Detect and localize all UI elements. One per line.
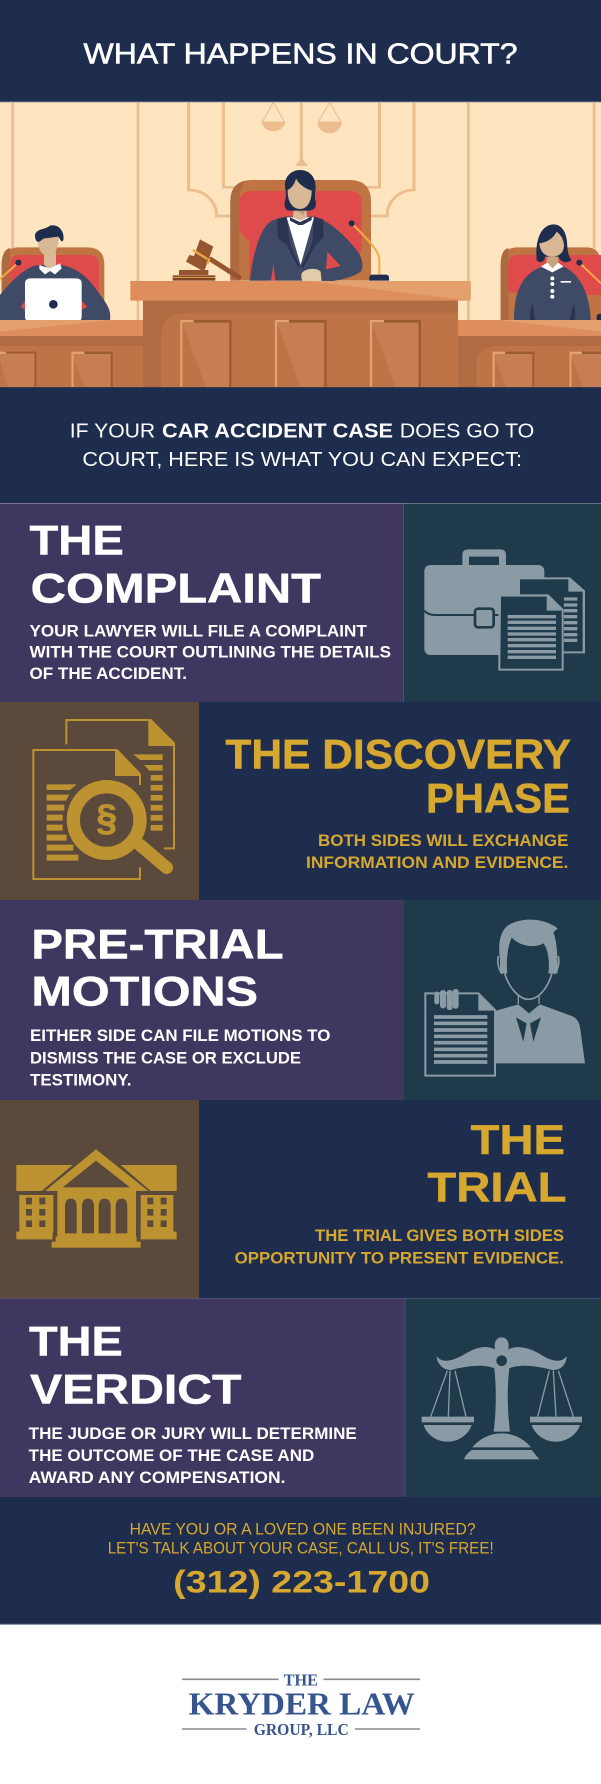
title: WHAT HAPPENS IN COURT? bbox=[84, 38, 518, 70]
panel: the trial bbox=[0, 1100, 601, 1298]
panel: pre-trial motions bbox=[0, 900, 601, 1100]
body text bbox=[235, 1227, 564, 1267]
logo bbox=[182, 1671, 420, 1739]
right clerk bbox=[501, 224, 601, 320]
body text: AWARD ANY COMPENSATION. bbox=[29, 1469, 285, 1487]
heading: PRE-TRIAL bbox=[31, 920, 284, 967]
body text: INFORMATION AND EVIDENCE. bbox=[306, 854, 568, 872]
heading bbox=[31, 920, 284, 1015]
desks bbox=[0, 281, 601, 387]
heading: COMPLAINT bbox=[31, 565, 321, 612]
intro band bbox=[0, 387, 601, 503]
body text: THE TRIAL GIVES BOTH SIDES bbox=[315, 1227, 564, 1245]
heading: VERDICT bbox=[30, 1366, 242, 1413]
body text: TESTIMONY. bbox=[30, 1071, 132, 1089]
icon: briefcase and documents bbox=[424, 549, 585, 671]
header band bbox=[0, 0, 601, 102]
courtroom illustration bbox=[0, 102, 601, 387]
heading: TRIAL bbox=[427, 1164, 566, 1211]
body text: THE OUTCOME OF THE CASE AND bbox=[29, 1447, 315, 1465]
body text: WITH THE COURT OUTLINING THE DETAILS bbox=[30, 644, 391, 662]
body text: EITHER SIDE CAN FILE MOTIONS TO bbox=[30, 1027, 330, 1045]
heading: THE DISCOVERY bbox=[225, 730, 571, 777]
body text: OPPORTUNITY TO PRESENT EVIDENCE. bbox=[235, 1249, 564, 1267]
body text: THE JUDGE OR JURY WILL DETERMINE bbox=[29, 1425, 357, 1443]
panel: the complaint bbox=[0, 503, 601, 702]
heading bbox=[30, 516, 321, 612]
heading bbox=[225, 730, 571, 821]
logo: THE bbox=[284, 1671, 318, 1690]
body text: DISMISS THE CASE OR EXCLUDE bbox=[30, 1049, 301, 1067]
icon: courthouse bbox=[16, 1149, 177, 1248]
panel: the discovery phase bbox=[0, 702, 601, 900]
cta text bbox=[108, 1520, 494, 1558]
section sign: § bbox=[96, 798, 117, 838]
courtroom wall and ornament bbox=[0, 102, 601, 387]
call to action band bbox=[0, 1497, 601, 1625]
logo: KRYDER LAW bbox=[189, 1686, 415, 1722]
intro text: IF YOUR bbox=[70, 421, 155, 443]
intro text bbox=[70, 421, 534, 471]
heading: PHASE bbox=[426, 774, 570, 821]
body text bbox=[29, 1425, 357, 1487]
intro text: CAR ACCIDENT CASE bbox=[162, 421, 393, 443]
body text: OF THE ACCIDENT. bbox=[30, 665, 187, 683]
heading: MOTIONS bbox=[31, 968, 258, 1015]
logo: GROUP, LLC bbox=[254, 1720, 349, 1739]
icon: documents under magnifier bbox=[33, 719, 175, 879]
heading: THE bbox=[29, 1318, 123, 1365]
heading bbox=[29, 1318, 242, 1413]
heading: THE bbox=[471, 1116, 565, 1163]
heading bbox=[427, 1116, 566, 1211]
judge, chair, gavel and microphone bbox=[173, 170, 389, 284]
body text bbox=[306, 832, 569, 872]
body text: BOTH SIDES WILL EXCHANGE bbox=[318, 832, 569, 850]
intro text: DOES GO TO bbox=[400, 421, 534, 443]
panel: the verdict bbox=[0, 1298, 601, 1497]
left clerk with laptop bbox=[0, 225, 110, 322]
body text: YOUR LAWYER WILL FILE A COMPLAINT bbox=[30, 623, 367, 641]
phone number: (312) 223-1700 bbox=[173, 1564, 430, 1600]
icon: scales of justice bbox=[422, 1337, 582, 1459]
intro text: COURT, HERE IS WHAT YOU CAN EXPECT: bbox=[82, 449, 522, 471]
body text bbox=[30, 623, 391, 683]
heading: THE bbox=[30, 516, 124, 563]
cta text: HAVE YOU OR A LOVED ONE BEEN INJURED? bbox=[130, 1520, 476, 1539]
body text bbox=[30, 1027, 330, 1089]
cta text: LET'S TALK ABOUT YOUR CASE, CALL US, IT'S FREE! bbox=[108, 1539, 494, 1558]
icon: lawyer holding document bbox=[425, 920, 585, 1076]
